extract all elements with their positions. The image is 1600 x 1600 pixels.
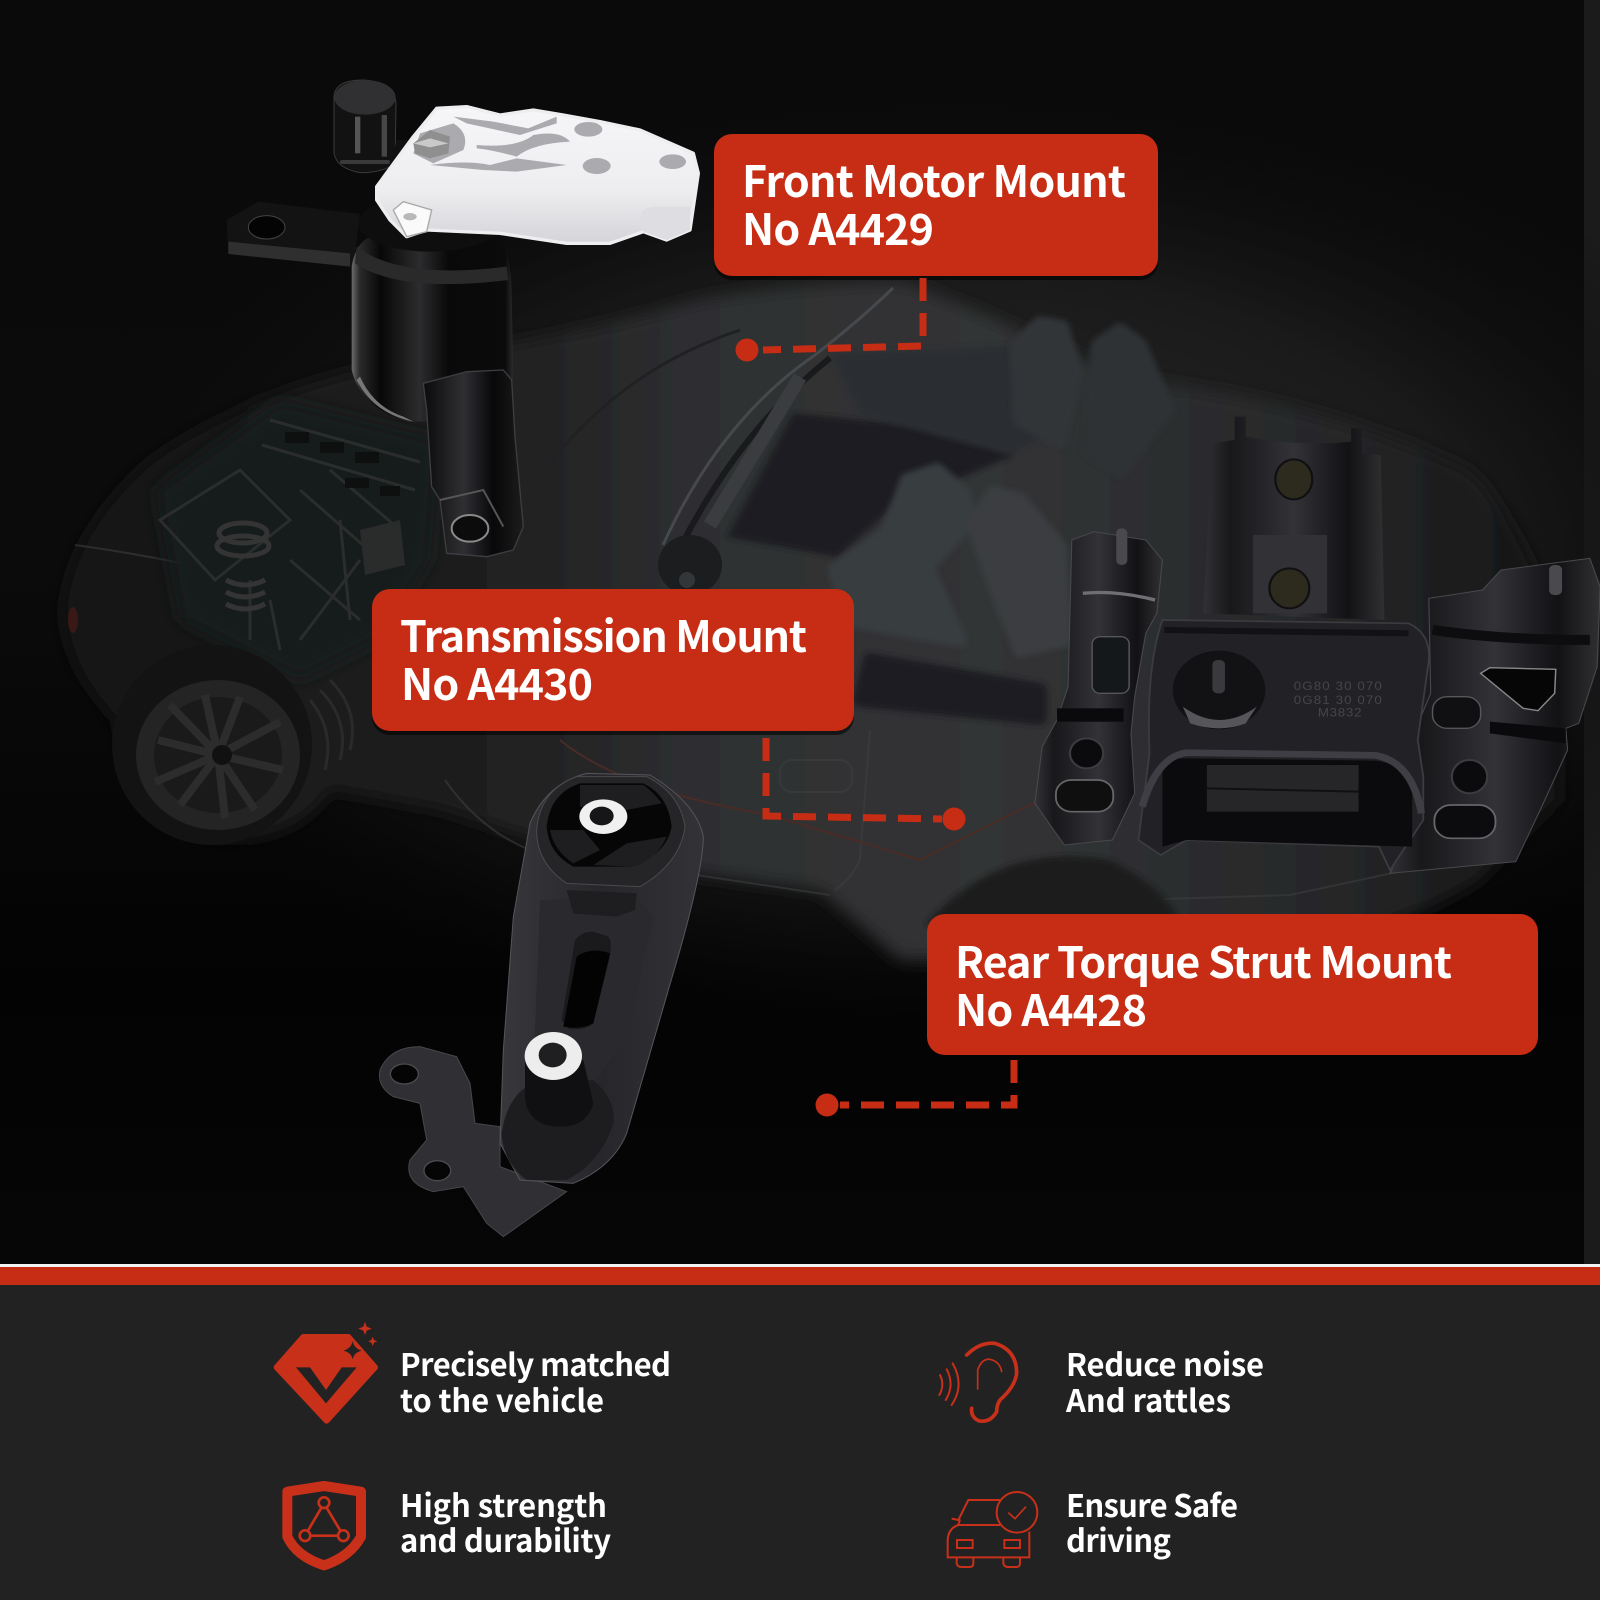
brake fluid reservoir — [360, 520, 405, 575]
strut body — [500, 773, 703, 1183]
text: reduce noise: And rattles — [1065, 1376, 1231, 1421]
text: high strength — [400, 1481, 611, 1561]
engine bay — [155, 400, 440, 680]
text: reduce noise: Reduce noise — [1066, 1340, 1264, 1385]
car wiring — [560, 740, 1040, 860]
text: precisely matched: to the vehicle — [400, 1376, 604, 1421]
text: high strength: High strength — [400, 1481, 607, 1526]
mount cylinder — [352, 195, 513, 422]
upper plate — [1203, 417, 1384, 620]
car windshield frame — [545, 288, 893, 548]
text: precisely matched: Precisely matched — [400, 1340, 671, 1385]
car tail light — [68, 607, 78, 633]
callout: front motor mount: Front Motor Mount — [742, 148, 1126, 210]
side bracket — [379, 1047, 567, 1237]
left flange — [1035, 528, 1162, 845]
connector: front motor mount — [736, 278, 923, 362]
background glow — [70, 80, 1600, 1040]
icon: car check — [948, 1492, 1037, 1567]
text: ensure safe: driving — [1066, 1516, 1171, 1561]
mount lower bracket — [423, 370, 523, 557]
centre housing: M3832 — [1318, 706, 1362, 720]
callout: rear torque strut mount: No A4428 — [955, 977, 1147, 1039]
callout: front motor mount: No A4429 — [742, 196, 934, 258]
centre housing: 0G80 30 070 — [1294, 680, 1383, 693]
car door panel — [830, 345, 1040, 455]
front wheel — [112, 645, 312, 845]
mount arm — [227, 202, 360, 267]
mount white plate — [377, 107, 698, 243]
icon: ear — [939, 1343, 1017, 1421]
callout: rear torque strut mount: Rear Torque Strut Mount — [955, 929, 1452, 991]
features panel — [0, 1264, 1600, 1600]
text: high strength: and durability — [400, 1516, 611, 1561]
callout: rear torque strut mount — [927, 914, 1538, 1055]
text: ensure safe: Ensure Safe — [1066, 1481, 1238, 1526]
callout: transmission mount: No A4430 — [401, 651, 593, 713]
icon: shield — [287, 1486, 361, 1565]
product: front motor mount — [227, 80, 698, 557]
product: rear torque mount bracket — [1035, 417, 1600, 873]
car interior — [727, 413, 1020, 557]
ghosted car — [62, 282, 1560, 960]
right edge strip — [1584, 0, 1600, 1264]
right flange — [1390, 558, 1600, 873]
car tyre tread — [310, 680, 352, 770]
rear wheel arch — [925, 856, 1180, 925]
centre housing — [1138, 620, 1429, 870]
product: transmission mount — [379, 773, 703, 1237]
engine spring — [217, 523, 269, 609]
mount bolt cap — [334, 80, 417, 177]
car seats — [835, 323, 1168, 718]
text: precisely matched — [400, 1340, 671, 1421]
lower rubber bush — [502, 1032, 614, 1180]
car body lines — [75, 545, 1500, 900]
connector: transmission mount — [766, 738, 966, 830]
text: reduce noise — [1065, 1340, 1264, 1421]
callout: transmission mount: Transmission Mount — [400, 603, 807, 665]
top rubber bush — [537, 777, 685, 887]
connector: rear torque strut mount — [816, 1060, 1014, 1116]
icon: diamond — [277, 1322, 377, 1421]
callout: front motor mount — [714, 134, 1158, 280]
centre housing: 0G81 30 070 — [1294, 694, 1383, 707]
callout: transmission mount — [372, 589, 854, 735]
text: ensure safe — [1066, 1481, 1238, 1561]
background — [0, 0, 1600, 1264]
car steering wheel — [658, 535, 722, 595]
car body — [62, 282, 1560, 960]
